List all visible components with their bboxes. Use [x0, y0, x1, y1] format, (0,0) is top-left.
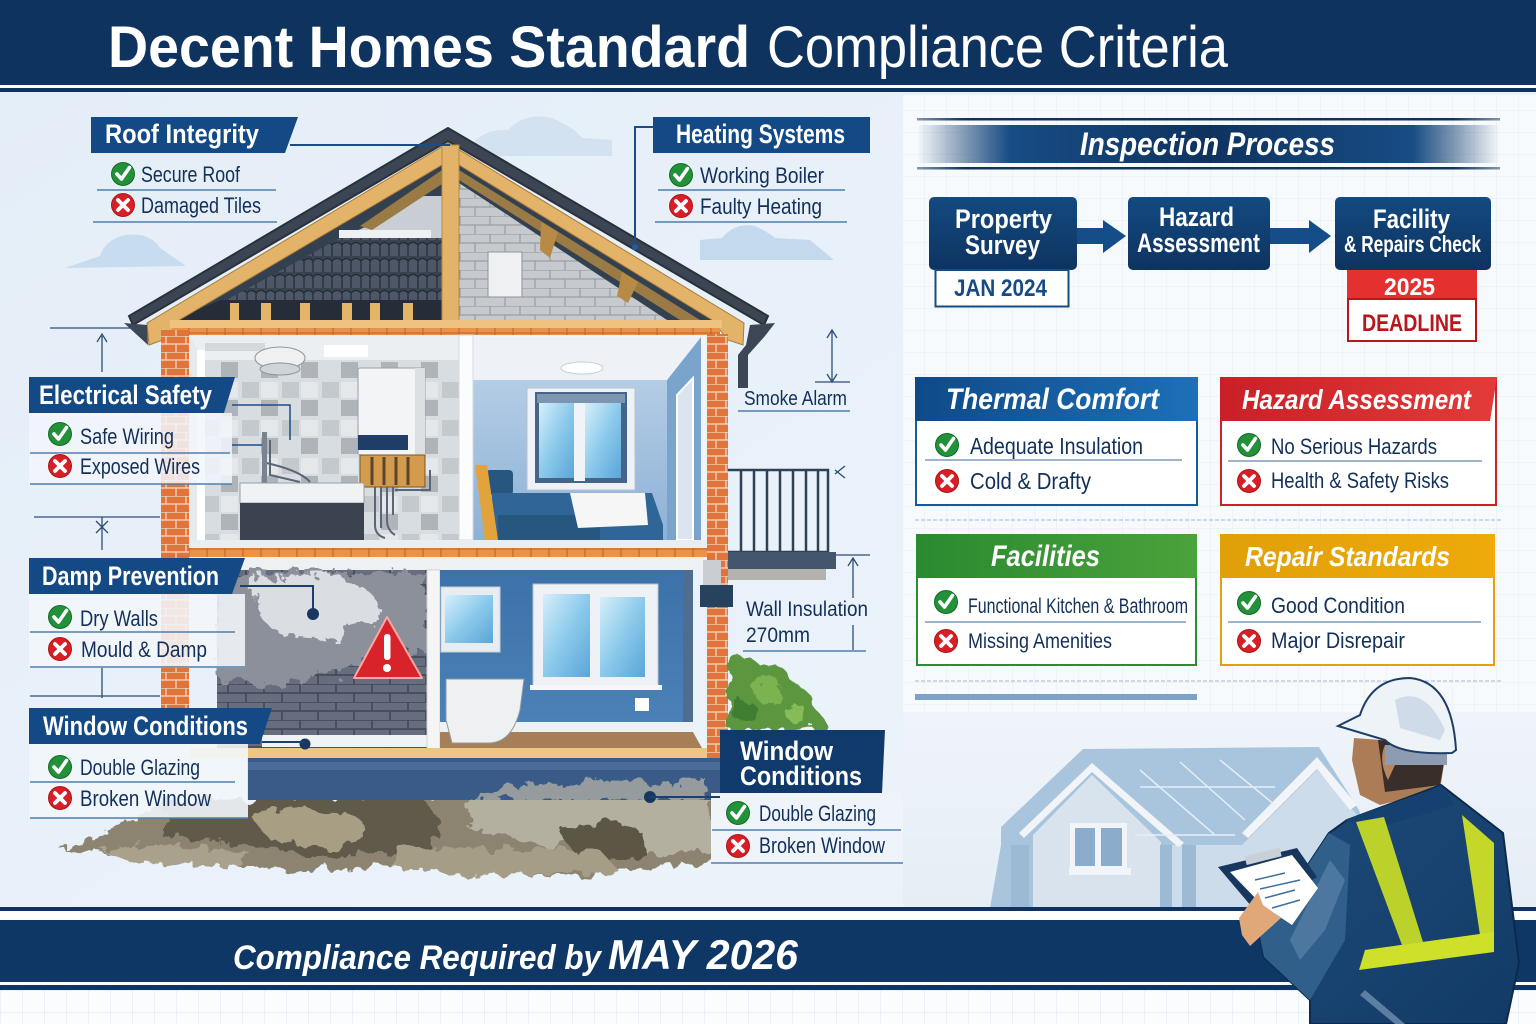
label: Electrical Safety: Safe Wiring — [80, 424, 174, 449]
label: Heating Systems — [632, 117, 870, 250]
step: Property Survey — [929, 197, 1077, 306]
label: Window Conditions right: Double Glazing — [759, 801, 876, 826]
footer text: MAY 2026 — [608, 931, 799, 978]
helmet — [1338, 678, 1456, 753]
bathroom — [440, 570, 693, 732]
label: Damp Prevention: Damp Prevention — [42, 561, 219, 591]
copper manifold — [360, 455, 425, 487]
attic joists — [230, 303, 413, 320]
divider dashed — [915, 520, 1503, 681]
label: Roof Integrity: Damaged Tiles — [141, 193, 261, 218]
step: Facility and Repairs Check: Facility — [1373, 204, 1450, 234]
date: 2025 deadline — [1347, 270, 1477, 341]
timber rafters — [147, 143, 744, 345]
date: 2025 deadline: 2025 — [1384, 274, 1435, 301]
upper floor room left — [189, 335, 459, 540]
label: Window Conditions right: Conditions — [740, 761, 862, 791]
boiler — [358, 368, 425, 455]
attic upper grey wall — [340, 196, 442, 238]
warning triangle — [354, 617, 422, 678]
label: Wall Insulation: 270mm — [746, 624, 810, 647]
arrow 2 — [1270, 220, 1331, 253]
damp room — [217, 570, 427, 748]
smoke alarm — [205, 343, 305, 375]
roof outer dark — [129, 128, 768, 325]
card: Hazard Assessment: Hazard Assessment — [1242, 384, 1472, 415]
right panel background grid — [903, 95, 1536, 712]
clipboard — [1218, 848, 1317, 913]
label: Window Conditions left: Window Conditions — [43, 711, 248, 741]
footer banner — [0, 907, 1536, 990]
foundation — [247, 758, 720, 800]
label: Damp Prevention: Dry Walls — [80, 606, 158, 631]
label: Heating Systems: Working Boiler — [700, 163, 824, 188]
door — [677, 378, 693, 540]
divider column lower — [427, 570, 440, 750]
coat — [1260, 785, 1519, 1024]
date: 2025 deadline: DEADLINE — [1362, 310, 1462, 337]
arrow 1 — [1077, 220, 1126, 253]
skirting — [262, 735, 427, 747]
right brick wall — [707, 334, 728, 758]
attic junction box — [488, 252, 522, 297]
upper floor room right — [473, 335, 707, 540]
house cutaway illustration — [60, 128, 836, 878]
card: Repair Standards: Major Disrepair — [1271, 628, 1405, 653]
card: Facilities — [916, 534, 1197, 665]
step: Property Survey: Property — [955, 204, 1052, 234]
card: Repair Standards: Repair Standards — [1245, 541, 1450, 572]
card: Repair Standards — [1220, 534, 1495, 665]
card: Facilities: Facilities — [991, 540, 1100, 573]
title: Decent Homes Standard — [108, 15, 750, 80]
label: Heating Systems: Heating Systems — [676, 119, 845, 149]
lower strip — [190, 557, 705, 570]
label: Roof Integrity: Secure Roof — [141, 162, 241, 187]
label: Electrical Safety — [29, 377, 290, 484]
card: Hazard Assessment: No Serious Hazards — [1271, 434, 1437, 459]
left brick wall — [161, 330, 189, 550]
date: JAN 2024 — [936, 270, 1068, 306]
progress bar accent — [915, 694, 1197, 700]
card: Repair Standards: Good Condition — [1271, 593, 1405, 618]
hand — [1239, 892, 1281, 946]
soil and damp ground — [60, 778, 720, 878]
roof tiles — [221, 238, 442, 303]
label: Wall Insulation: Wall Insulation — [746, 598, 868, 621]
label: Window Conditions right — [644, 730, 903, 863]
small window — [441, 587, 500, 652]
label: Wall Insulation — [743, 598, 868, 651]
pipes — [262, 440, 430, 538]
card: Facilities: Missing Amenities — [968, 630, 1112, 653]
inspector figure — [1218, 678, 1519, 1024]
attic back — [170, 160, 726, 322]
floor slab — [172, 540, 720, 548]
card: Hazard Assessment: Health & Safety Risks — [1271, 468, 1449, 493]
ghost house illustration — [990, 747, 1375, 908]
bed — [475, 465, 663, 540]
label: Window Conditions left — [29, 708, 310, 818]
ceiling panel light — [324, 345, 368, 357]
title — [108, 15, 1229, 80]
header bar — [0, 0, 1536, 92]
title: Compliance Criteria — [767, 15, 1229, 80]
downpipe bracket — [700, 585, 733, 607]
label: Roof Integrity: Roof Integrity — [105, 119, 259, 149]
card: Thermal Comfort — [915, 377, 1198, 505]
label: Damp Prevention — [29, 558, 319, 668]
dimension marks — [30, 328, 870, 698]
date: JAN 2024: JAN 2024 — [954, 275, 1048, 302]
card: Hazard Assessment — [1220, 377, 1497, 505]
bush — [720, 658, 830, 732]
step: Facility and Repairs Check: & Repairs Check — [1344, 231, 1481, 257]
clouds — [65, 116, 834, 268]
timber beam — [190, 748, 707, 758]
label: Roof Integrity — [91, 117, 450, 222]
bedroom window — [527, 388, 635, 490]
neck and face — [1352, 738, 1447, 805]
gable brick wall — [459, 183, 667, 320]
step: Hazard Assessment: Hazard — [1159, 202, 1234, 232]
label: Smoke Alarm: Smoke Alarm — [744, 388, 847, 410]
label: Window Conditions right: Window — [740, 736, 834, 766]
label: Electrical Safety: Exposed Wires — [80, 454, 200, 479]
gutters — [124, 323, 775, 388]
wall socket — [635, 698, 649, 711]
card: Thermal Comfort: Adequate Insulation — [970, 433, 1143, 459]
card: Thermal Comfort: Cold & Drafty — [970, 468, 1091, 494]
step: Facility and Repairs Check — [1335, 197, 1491, 341]
balcony — [728, 470, 836, 580]
label: Heating Systems: Faulty Heating — [700, 194, 822, 219]
inspection process heading — [917, 118, 1500, 170]
label: Window Conditions right: Broken Window — [759, 833, 885, 858]
step: Hazard Assessment: Assessment — [1137, 228, 1260, 258]
step: Hazard Assessment — [1128, 197, 1270, 270]
footer text: Compliance Required by — [233, 939, 603, 977]
label: Damp Prevention: Mould & Damp — [81, 637, 207, 662]
label: Window Conditions left: Double Glazing — [80, 755, 200, 780]
sink unit — [240, 432, 364, 540]
label: Electrical Safety: Electrical Safety — [39, 380, 212, 410]
card: Thermal Comfort: Thermal Comfort — [946, 383, 1161, 416]
step: Property Survey: Survey — [965, 230, 1040, 260]
card: Facilities: Functional Kitchen & Bathroom — [968, 595, 1188, 618]
toilet — [446, 679, 524, 743]
inspection process heading: Inspection Process — [1080, 126, 1335, 162]
label: Window Conditions left: Broken Window — [80, 786, 211, 811]
mould patch — [250, 574, 380, 641]
divider column upper — [459, 335, 473, 540]
hi-vis stripes — [1356, 817, 1423, 945]
bathroom window — [530, 584, 662, 690]
